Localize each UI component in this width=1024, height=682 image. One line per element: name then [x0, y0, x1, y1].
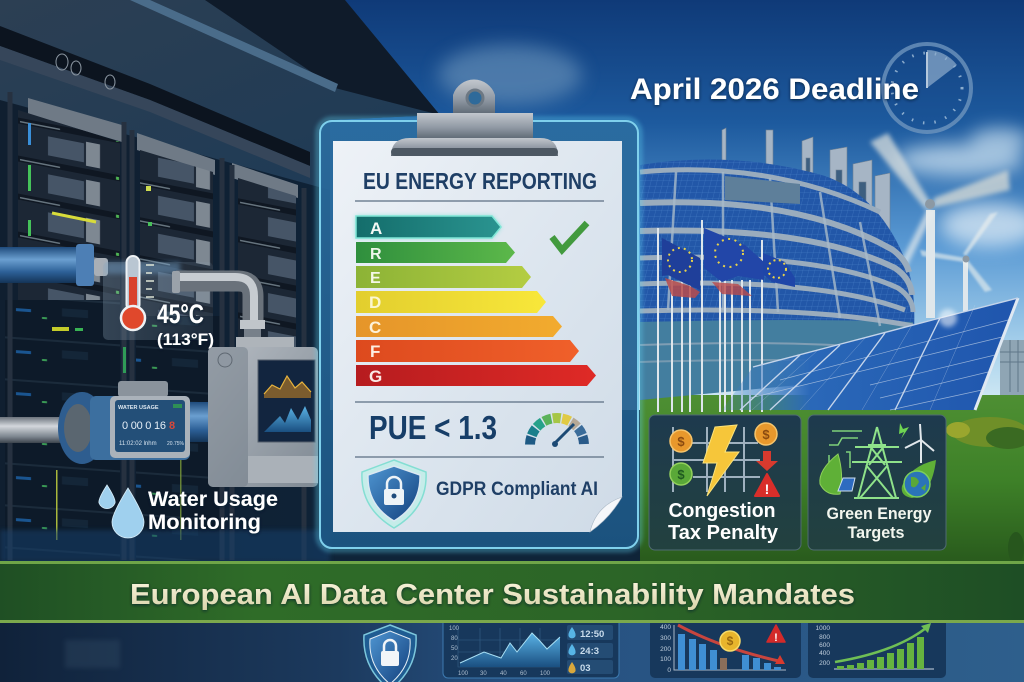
solar array: [722, 298, 1018, 410]
coins: [670, 423, 777, 485]
rating C: C: [369, 318, 381, 337]
line chart panel: 50: [451, 646, 458, 652]
card label: Targets: [848, 524, 904, 542]
server rack 1 cap: [28, 98, 122, 142]
server rack 3 cap: [232, 163, 298, 198]
cost bar chart panel: 200: [660, 646, 671, 653]
water usage meter: [58, 381, 190, 464]
paper title: EU ENERGY REPORTING: [363, 168, 597, 194]
background: grass lawn: [640, 395, 1024, 565]
growth bar chart panel: 200: [819, 660, 830, 667]
warning: [767, 625, 785, 642]
thermometer scale: [146, 265, 154, 297]
cost bar chart panel: 100: [660, 656, 671, 663]
server rack 2: [140, 150, 213, 320]
bottom strip: [0, 620, 1024, 682]
pipe: grey elbow: [172, 271, 294, 347]
meter display: 11:02:02 lnhm: [119, 441, 157, 447]
thermometer readout panel: [103, 256, 214, 349]
page curl: [590, 497, 622, 532]
cost bar chart panel: [650, 615, 801, 678]
pipe: upper blue coolant: [0, 244, 180, 286]
meter display: [115, 400, 185, 452]
rating E: [356, 266, 531, 288]
GDPR shield icon: [362, 460, 426, 528]
upper right dark structure: [205, 0, 440, 115]
metal clip: [391, 80, 558, 156]
data center backdrop: [0, 0, 445, 560]
pipe: lower grey inlet: [0, 417, 70, 443]
bottom shield icon: [364, 625, 416, 682]
ceiling fixtures: [56, 54, 115, 89]
falling arrow: [678, 625, 783, 662]
rating E: E: [370, 270, 381, 287]
water stat rows: [567, 625, 613, 674]
meter display: WATER USAGE: [118, 405, 159, 411]
rating A: A: [370, 219, 382, 238]
solar tile: [838, 478, 855, 491]
growth bar chart panel: 400: [819, 650, 830, 657]
cost bar chart panel: 0: [667, 667, 671, 674]
circuit traces: [829, 431, 862, 472]
warning triangle: !: [765, 481, 769, 497]
rating A: [356, 216, 501, 238]
energy rating chart: [356, 216, 596, 386]
upper band shade: [725, 176, 800, 204]
rating G: G: [369, 367, 382, 386]
line chart panel: 100: [449, 626, 460, 632]
pylon: [852, 427, 902, 498]
wind turbine: [905, 424, 934, 463]
water drops icon: [99, 485, 144, 538]
server rack 1 lower: [5, 300, 120, 530]
cost bar chart panel: $: [727, 634, 734, 648]
warning triangle: [755, 474, 779, 497]
growth bar chart panel: 600: [819, 642, 830, 649]
enclosure dashboard screen: [258, 360, 315, 442]
spark: [899, 423, 909, 439]
meter display: 20.75%: [167, 441, 185, 447]
thermometer bulb: [121, 306, 145, 330]
GDPR label: GDPR Compliant AI: [436, 479, 598, 500]
lower glass band: [640, 320, 913, 400]
server rack 2 cap: [137, 133, 215, 175]
card: green energy targets: [808, 415, 946, 550]
rack pillars: [10, 92, 304, 560]
panel dividers: [668, 172, 880, 326]
pipe: meter to enclosure: [185, 397, 241, 449]
water stat rows: 24:3: [580, 646, 599, 657]
down arrow: [756, 451, 778, 471]
server rack 3: [238, 178, 296, 360]
main title: European AI Data Center Sustainability Mandates: [130, 579, 855, 611]
thermometer tube: [126, 256, 140, 311]
PUE gauge icon: [519, 407, 595, 483]
growth bar chart panel: [808, 615, 946, 678]
line chart panel: 100: [458, 671, 469, 677]
card label: Green Energy: [826, 505, 932, 523]
wind turbine: rear: [920, 212, 998, 312]
bushes: [946, 417, 1024, 564]
lightning bolt: [703, 425, 739, 496]
bottom strip blurred rack: [65, 640, 120, 668]
coin: [720, 631, 740, 651]
dark ceiling strip: [0, 26, 310, 166]
ceiling: [0, 0, 440, 190]
water stat rows: 12:50: [580, 629, 604, 640]
background: sky: [300, 0, 1024, 410]
card: congestion tax penalty: [649, 415, 801, 550]
line chart panel: 60: [520, 671, 527, 677]
EU flags: [662, 228, 795, 298]
growth arrow: [835, 628, 926, 662]
flagpoles: [658, 220, 762, 412]
check mark: [552, 223, 587, 250]
rating C: [356, 316, 562, 337]
meter display: 8: [169, 420, 175, 432]
rating R: R: [370, 246, 382, 263]
rating F: [356, 340, 579, 362]
building: european parliament with solar panels: [640, 128, 914, 400]
card label: [826, 505, 932, 542]
wind turbine: front: [870, 133, 1010, 318]
floor glow: [0, 530, 330, 562]
growth bar chart panel: 800: [819, 634, 830, 641]
rating R: [356, 242, 515, 263]
rating F: F: [370, 342, 380, 361]
water usage label: Monitoring: [148, 511, 261, 534]
globe with leaf: [902, 460, 936, 498]
thermometer fill: [129, 277, 137, 313]
temperature celsius: 45°C: [157, 299, 204, 329]
server rack 2 lower: [136, 316, 220, 537]
water stat rows: 03: [580, 663, 591, 674]
line chart panel: 20: [451, 656, 458, 662]
clock icon: [883, 44, 971, 132]
cost bar chart panel: 300: [660, 635, 671, 642]
clipboard: [318, 80, 640, 550]
coins: $: [677, 467, 685, 482]
roof fins: [722, 128, 890, 250]
background: clouds: [438, 45, 1024, 247]
deadline heading: April 2026 Deadline: [630, 73, 919, 106]
rack LEDs: [28, 123, 182, 540]
meter display: 0 00 0 16: [122, 420, 166, 432]
growth bar chart panel: 1000: [816, 625, 830, 632]
card label: Tax Penalty: [668, 522, 779, 544]
clipboard glow: [318, 119, 640, 550]
line chart panel: 40: [500, 671, 507, 677]
grid lines: [672, 427, 760, 492]
line chart panel: 30: [480, 671, 487, 677]
line chart panel: [443, 615, 619, 678]
clipboard board: [320, 121, 638, 548]
coins: $: [762, 427, 770, 442]
title banner: [0, 561, 1024, 623]
rating G: [356, 365, 596, 386]
rating A glow: [356, 216, 501, 238]
card label: Congestion: [668, 500, 776, 522]
PUE metric: PUE < 1.3: [369, 409, 497, 446]
card label: [668, 500, 779, 544]
line chart panel: 100: [540, 671, 551, 677]
water usage label: [148, 488, 278, 534]
ring bands: [640, 170, 913, 362]
lighter cornice: [0, 46, 310, 178]
rating D: D: [369, 293, 381, 312]
cost bar chart panel: !: [774, 632, 778, 644]
cost bar chart panel: 400: [660, 624, 671, 631]
server rack 1: [18, 110, 120, 310]
rating D: [356, 291, 546, 313]
temperature fahrenheit: (113°F): [157, 330, 214, 349]
line chart panel: 80: [451, 636, 458, 642]
coins: $: [677, 434, 685, 449]
water usage label: Water Usage: [148, 488, 278, 511]
paper sheet: [333, 141, 622, 532]
sensor enclosure: [208, 347, 318, 487]
drum: [640, 160, 914, 400]
ceiling beam: [130, 0, 338, 92]
left leaf: [820, 454, 842, 494]
background: distant building: [1000, 340, 1024, 395]
